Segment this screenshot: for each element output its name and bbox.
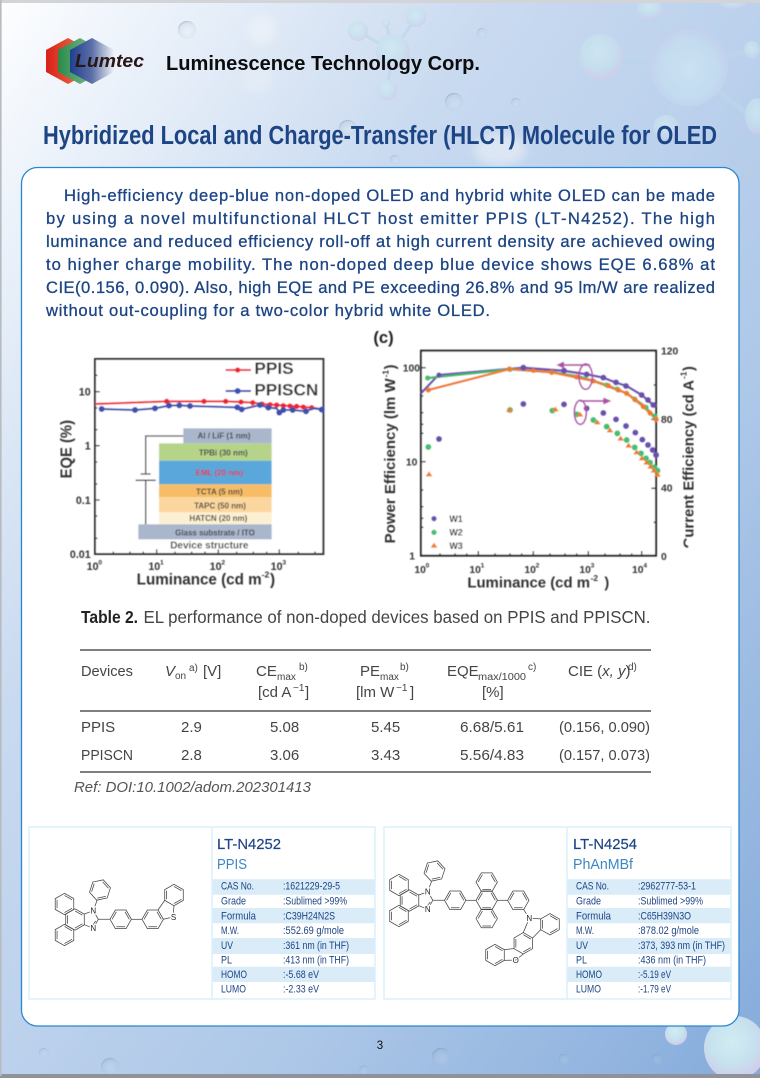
current efficiency points W3 [426, 406, 661, 477]
device structure stack: Device structure [170, 540, 249, 551]
left y axis labels: 1 [409, 551, 415, 562]
axis title: luminance: ) [604, 576, 609, 592]
current efficiency points W1 [436, 401, 659, 458]
legend: PPISCN [254, 380, 318, 399]
x axis labels: 2 [536, 563, 540, 570]
power efficiency curves [421, 368, 656, 419]
chart c: power and current efficiency [373, 328, 698, 592]
table header: [cd A [258, 684, 291, 701]
x axis labels: 1 [481, 563, 485, 570]
card: LT-N4254 PhAnMBf [384, 827, 731, 999]
table 2: EL performance [80, 607, 651, 772]
x axis labels: 10 [632, 565, 644, 576]
molecule: PhAnMBf: N [425, 905, 431, 914]
axis title: EQE: EQE (%) [59, 420, 76, 478]
spec table: HOMO [576, 969, 602, 981]
table header: max [277, 672, 296, 683]
spec table: LUMO [576, 984, 601, 996]
spec table: :-2.33 eV [283, 984, 320, 996]
table header: b) [299, 662, 308, 673]
spec table: HOMO [221, 969, 247, 981]
table row: PPISCN: PPISCN [81, 747, 133, 764]
x axis labels: 10 [210, 561, 222, 573]
x axis labels [87, 560, 286, 573]
spec table: CAS No. [576, 881, 609, 893]
arrows and ellipses [558, 362, 609, 424]
intro paragraph [45, 186, 715, 320]
device structure stack: Glass substrate / ITO [175, 529, 255, 538]
table header: [%] [482, 684, 504, 701]
device structure stack [136, 428, 272, 551]
spec table: :-5.68 eV [283, 969, 320, 981]
spec table: CAS No. [221, 881, 254, 893]
legend: PPIS [254, 359, 294, 378]
axis title: current efficiency: Current Efficiency (cd A [681, 380, 697, 548]
axis title: luminance: -2 [262, 569, 270, 579]
device structure stack: TPBi (30 nm) [199, 448, 248, 457]
x axis labels: 10 [148, 561, 160, 573]
spec table: :878.02 g/mole [638, 925, 699, 937]
table header: d) [628, 662, 637, 673]
table header: on [175, 671, 186, 682]
spec table: UV [576, 940, 589, 952]
x axis labels: 0 [98, 560, 102, 567]
spec table: PL [576, 955, 587, 967]
device structure stack: TAPC (50 nm) [194, 501, 246, 510]
y axis labels: 0.01 [70, 549, 91, 561]
right y axis labels: 0 [661, 552, 667, 563]
spec table: Formula [576, 911, 611, 923]
table header: ] [410, 684, 414, 701]
table header: ] [305, 684, 309, 701]
device structure stack: TCTA (5 nm) [196, 487, 243, 496]
molecule: PhAnMBf [390, 858, 559, 966]
x axis labels: 10 [579, 565, 591, 576]
legend: W2 [449, 528, 463, 538]
table header: V [165, 663, 177, 680]
table row: PPIS: 5.45 [371, 719, 400, 736]
table header: −1 [293, 683, 305, 694]
spec table: M.W. [221, 925, 239, 937]
spec table: :Sublimed >99% [638, 896, 703, 908]
molecule: PPIS: S [171, 913, 176, 922]
spec table: :2962777-53-1 [638, 881, 696, 893]
device structure stack: EML (20 nm) [196, 469, 243, 478]
left y axis labels [403, 363, 420, 562]
product abbreviation: PPIS [217, 857, 247, 873]
table header: PE [360, 663, 380, 680]
intro paragraph: High-efficiency deep-blue non-doped OLED and hybrid white OLED can be made [64, 186, 715, 205]
intro paragraph: luminance and reduced efficiency roll-off at high current density are achieved owing [46, 232, 715, 251]
molecule: PPIS [55, 877, 183, 946]
card: LT-N4252 PPIS [29, 827, 375, 999]
spec table: M.W. [576, 925, 594, 937]
spec table [568, 879, 730, 996]
x axis labels: 1 [160, 560, 164, 567]
left y axis labels: 10 [406, 457, 418, 468]
axis title: current efficiency: ) [681, 366, 697, 371]
panel letter: (c) [373, 328, 394, 347]
y axis labels [70, 387, 91, 561]
spec table: PL [221, 955, 232, 967]
legend [226, 359, 318, 399]
spec table: :1621229-29-5 [283, 881, 340, 893]
axis title: luminance: -2 [591, 573, 598, 583]
legend: W3 [449, 541, 463, 551]
spec table: Grade [576, 896, 601, 908]
table header: a) [189, 663, 198, 674]
page number: 3 [377, 1040, 383, 1052]
axis title: luminance: Luminance (cd m [467, 576, 590, 592]
intro paragraph: by using a novel multifunctional HLCT host emitter PPIS (LT-N4252). The high [46, 209, 715, 228]
table row: PPISCN: 3.06 [270, 747, 299, 764]
spec table: :413 nm (in THF) [283, 955, 349, 967]
spec table: :373, 393 nm (in THF) [638, 940, 725, 952]
device structure stack: Al / LiF (1 nm) [198, 432, 251, 441]
series: PPISCN [99, 402, 325, 416]
current efficiency points W2 [425, 407, 660, 474]
x axis labels: 10 [414, 565, 426, 576]
y axis labels: 10 [79, 387, 91, 399]
x axis labels: 10 [271, 561, 283, 573]
table header: −1 [396, 683, 408, 694]
molecule: PhAnMBf: N [526, 914, 532, 923]
table row: PPISCN: (0.157, 0.073) [559, 747, 650, 764]
product abbreviation: PhAnMBf [573, 857, 634, 873]
product name: LT-N4252 [217, 837, 281, 853]
spec table: :Sublimed >99% [283, 896, 347, 908]
spec table: :-1.79 eV [638, 984, 672, 996]
legend [431, 514, 463, 551]
right y axis labels: 120 [661, 346, 678, 357]
x axis labels: 10 [87, 561, 99, 573]
table header: CIE (x, y) [568, 663, 631, 680]
table header: [lm W [356, 684, 395, 701]
table row: PPIS: PPIS [81, 719, 115, 736]
table header: max [380, 672, 399, 683]
logo: Lumtec hexagons [46, 38, 144, 84]
axis title: power efficiency: ) [383, 364, 399, 369]
legend: W1 [449, 514, 463, 524]
chart: EQE vs luminance with device structure [59, 359, 325, 588]
intro paragraph: without out-coupling for a two-color hybrid white OLED. [45, 301, 490, 320]
spec table: LUMO [221, 984, 246, 996]
x axis labels: 3 [282, 560, 286, 567]
spec table: :552.69 g/mole [283, 925, 344, 937]
axis title: power efficiency: Power Efficiency (lm W [383, 378, 399, 543]
x axis labels: 3 [591, 563, 595, 570]
table row: PPIS [81, 719, 650, 736]
x axis labels: 4 [643, 563, 647, 570]
x axis labels: 2 [221, 560, 225, 567]
y axis labels: 0.1 [76, 495, 91, 507]
axis title: luminance: ) [270, 571, 275, 588]
power efficiency points [425, 365, 659, 422]
molecule: PPIS: N [90, 924, 96, 933]
spec table: Formula [221, 911, 256, 923]
table row: PPIS: 2.9 [181, 719, 202, 736]
table header: Devices [81, 663, 133, 680]
axis title: current efficiency: -1 [679, 371, 689, 379]
table row: PPIS: 5.08 [270, 719, 299, 736]
right y axis labels: 40 [661, 484, 673, 495]
main white panel [22, 168, 739, 1026]
table caption: Table 2. [81, 607, 138, 627]
x axis labels: 0 [426, 563, 430, 570]
company name: Luminescence Technology Corp. [166, 53, 480, 75]
series: PPIS [95, 399, 323, 410]
molecule: PPIS: N [90, 906, 96, 916]
x axis labels: 10 [469, 565, 481, 576]
table header: max/1000 [478, 672, 526, 683]
table row: PPIS: 6.68/5.61 [460, 719, 524, 736]
spec table: :C65H39N3O [638, 911, 691, 923]
left y axis labels: 100 [403, 363, 420, 374]
table header: c) [528, 662, 536, 673]
table row: PPISCN [81, 747, 650, 764]
spec table: :436 nm (in THF) [638, 955, 706, 967]
spec table: UV [221, 940, 234, 952]
intro paragraph: to higher charge mobility. The non-doped deep blue device shows EQE 6.68% at [46, 255, 715, 274]
spec table: :361 nm (in THF) [283, 940, 349, 952]
right y axis labels [661, 346, 678, 563]
table header: b) [400, 662, 409, 673]
axis title: power efficiency: -1 [380, 370, 390, 377]
right y axis labels: 80 [661, 415, 673, 426]
reference line: Ref: DOI:10.1002/adom.202301413 [74, 780, 311, 796]
table header [81, 662, 637, 701]
axis title: luminance: Luminance (cd m [137, 571, 262, 588]
table row: PPISCN: 2.8 [181, 747, 202, 764]
table row: PPISCN: 3.43 [371, 747, 400, 764]
spec table [213, 879, 374, 996]
y axis labels: 1 [85, 441, 91, 453]
spec table: :-5.19 eV [638, 969, 672, 981]
table row: PPISCN: 5.56/4.83 [460, 747, 524, 764]
device structure stack: HATCN (20 nm) [189, 514, 248, 523]
spec table: Grade [221, 896, 246, 908]
table header: EQE [447, 663, 479, 680]
logo: Lumtec hexagons: Lumtec [75, 51, 144, 71]
table caption: EL performance of non-doped devices based on PPIS and PPISCN. [144, 607, 650, 627]
spec table: :C39H24N2S [283, 911, 335, 923]
x axis labels [414, 563, 647, 576]
molecule: PhAnMBf: O [513, 956, 519, 965]
table header: [V] [203, 663, 221, 680]
molecule: PhAnMBf: N [425, 888, 431, 896]
intro paragraph: CIE(0.156, 0.090). Also, high EQE and PE exceeding 26.8% and 95 lm/W are realized [46, 278, 715, 297]
table header: CE [256, 663, 277, 680]
table row: PPIS: (0.156, 0.090) [559, 719, 650, 736]
product name: LT-N4254 [573, 837, 637, 853]
x axis labels: 10 [524, 565, 536, 576]
